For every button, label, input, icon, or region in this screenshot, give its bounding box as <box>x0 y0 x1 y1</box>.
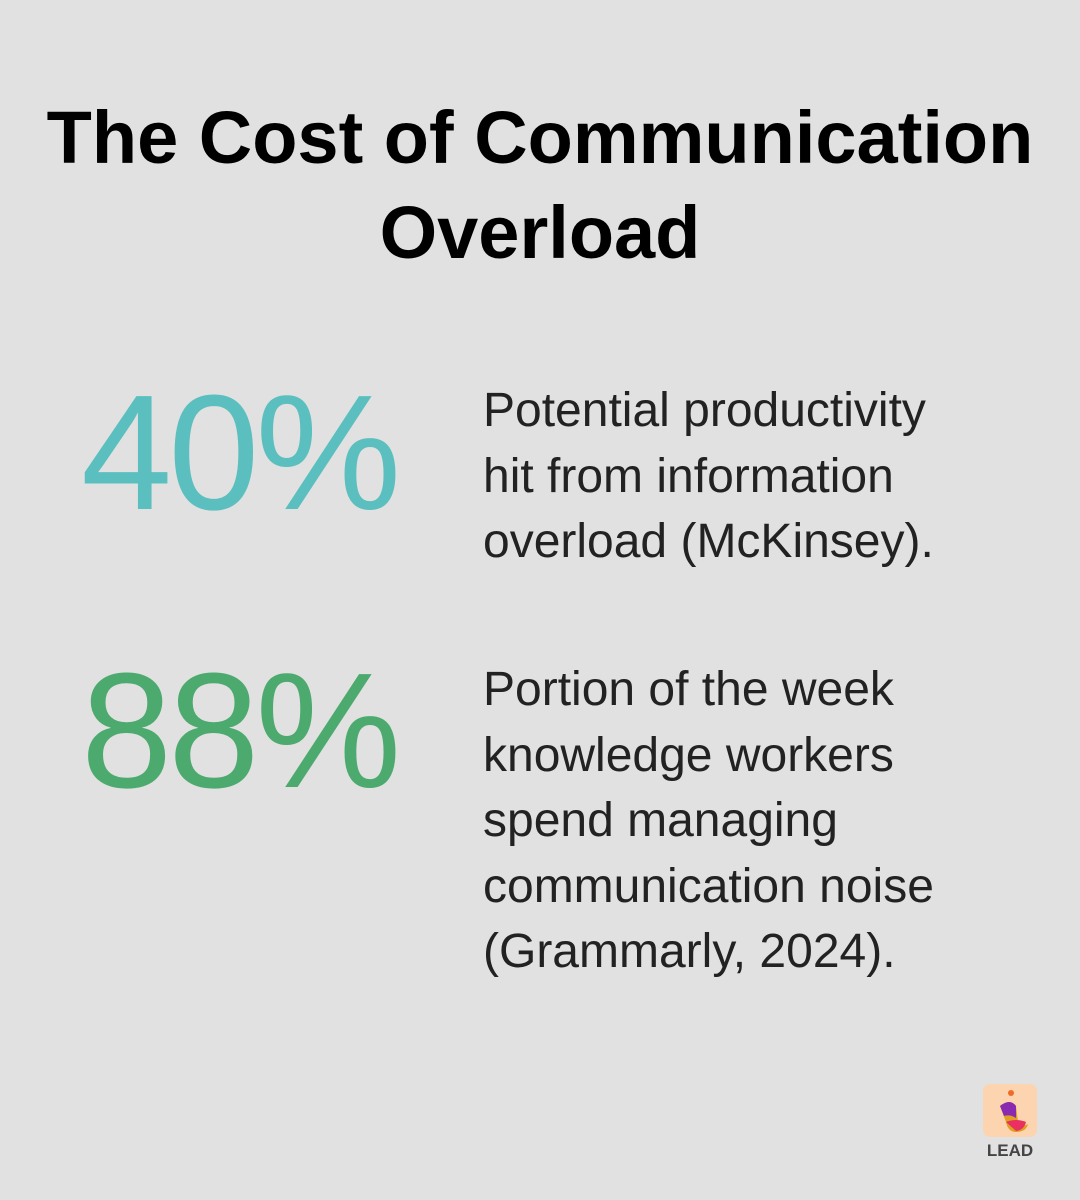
text: 40% description: hit from information <box>483 450 894 502</box>
text: 40% description: overload (McKinsey). <box>483 515 934 568</box>
text: 40% description: Potential productivity <box>483 384 926 437</box>
title: The Cost of Communication <box>47 96 1033 179</box>
text: 88% description: knowledge workers <box>483 728 894 782</box>
text: 88% description: spend managing <box>483 794 838 847</box>
title <box>47 96 1033 274</box>
logo: LEAD <box>983 1084 1037 1160</box>
title: Overload <box>380 191 700 274</box>
text: 40% description <box>483 384 934 568</box>
stat: 88%: 88% <box>81 639 397 822</box>
text: 88% description: Portion of the week <box>483 663 894 716</box>
logo: LEAD: LEAD <box>987 1141 1033 1160</box>
text: 88% description <box>483 663 934 978</box>
text: 88% description: (Grammarly, 2024). <box>483 925 896 978</box>
stat: 40%: 40% <box>81 361 397 544</box>
text: 88% description: communication noise <box>483 860 934 912</box>
